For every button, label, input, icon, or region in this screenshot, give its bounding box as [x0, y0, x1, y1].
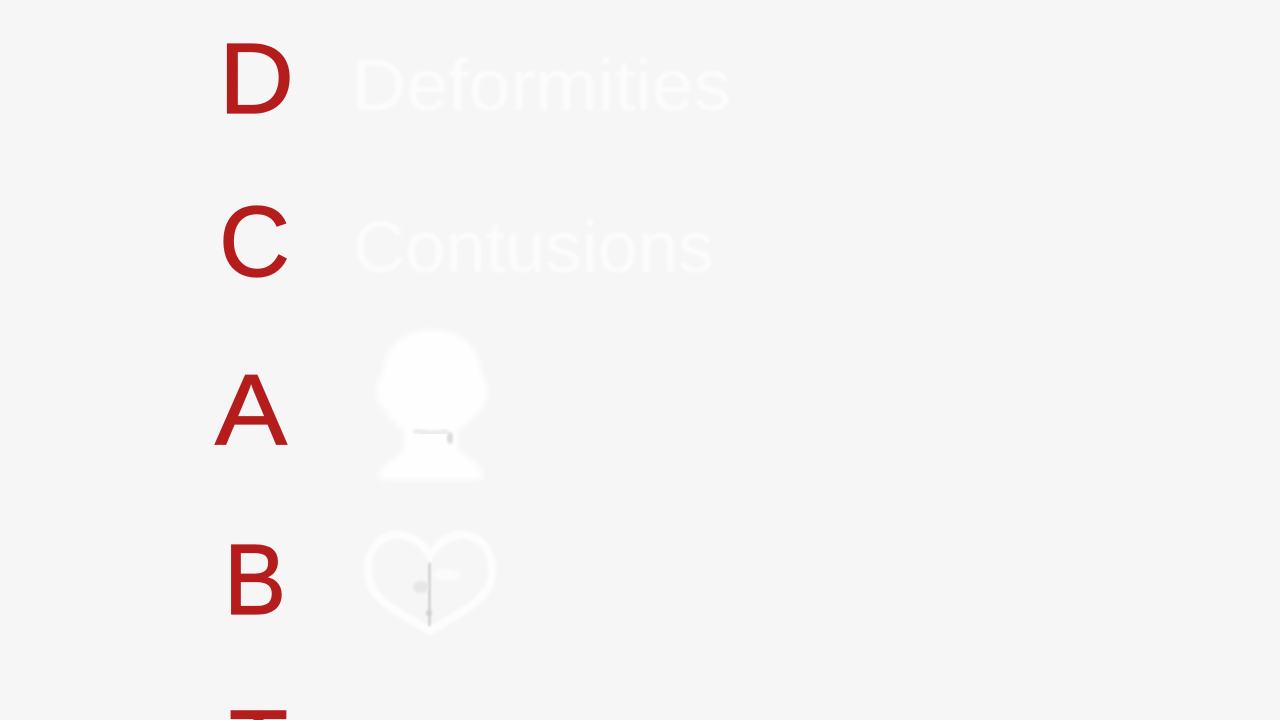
icon: heart with medical staff [368, 535, 492, 631]
letter D: D [219, 23, 294, 135]
letter A: A [215, 354, 287, 466]
letter C: C [219, 186, 290, 298]
label: Contusions: Contusions [353, 208, 714, 288]
icon: head with neck wound [376, 330, 488, 480]
letter B: B [224, 524, 286, 636]
label: Deformities: Deformities [352, 46, 731, 126]
